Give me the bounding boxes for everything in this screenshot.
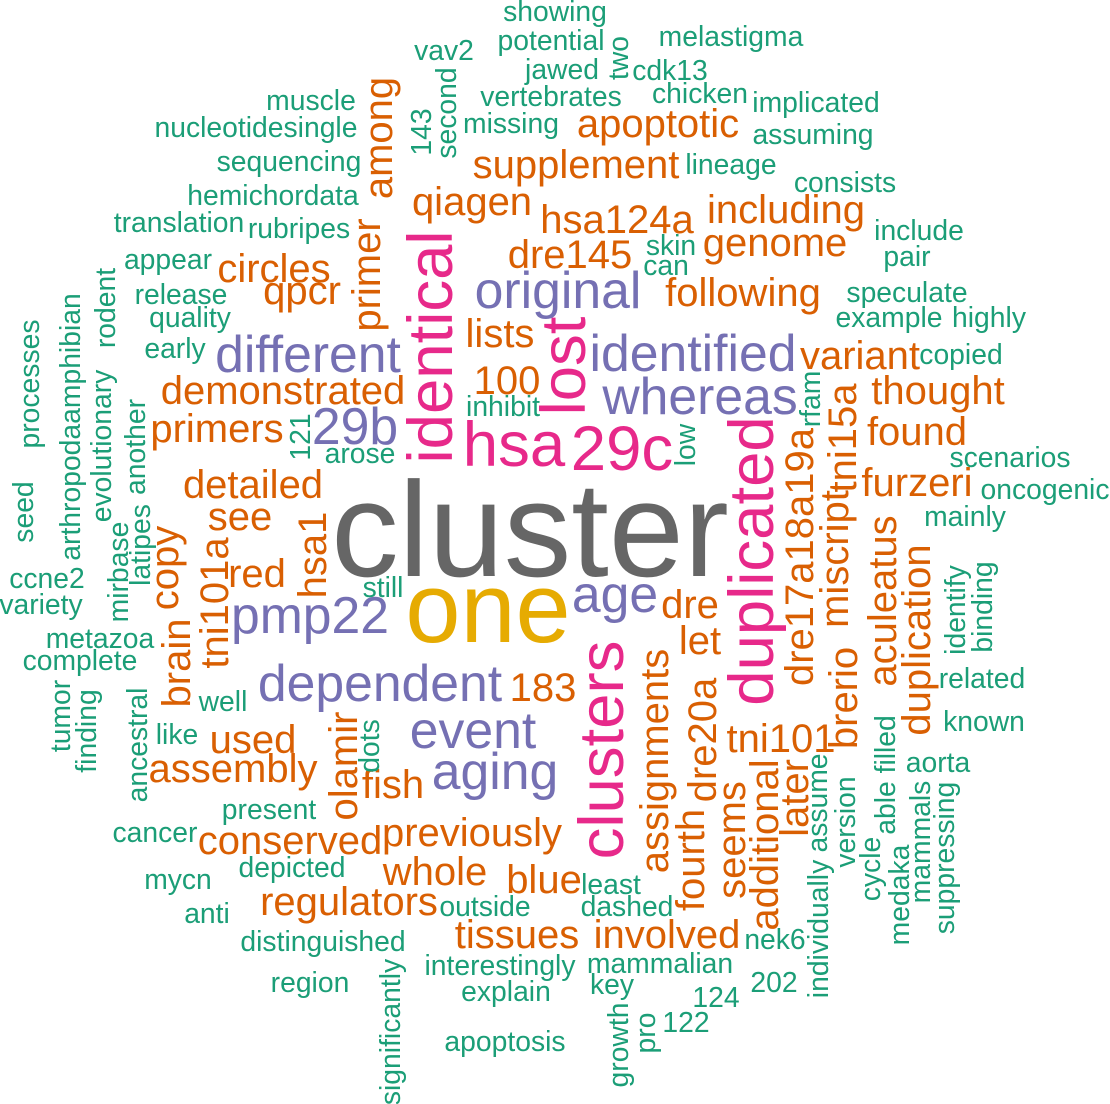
orange word group: supplement bbox=[473, 143, 679, 187]
green word group: 143 bbox=[405, 108, 437, 156]
word: clusters: clusters bbox=[567, 641, 637, 859]
orange word group: among bbox=[357, 77, 401, 199]
word: 29c: 29c bbox=[571, 414, 673, 484]
orange word group: brerio bbox=[822, 647, 866, 749]
orange word group: assembly bbox=[149, 747, 317, 791]
green word group: nucleotidesingle bbox=[155, 111, 357, 143]
green word group: copied bbox=[919, 338, 1003, 370]
orange word group: tni101a bbox=[193, 537, 237, 669]
purple word group: different bbox=[215, 325, 401, 383]
orange word group: demonstrated bbox=[161, 369, 405, 413]
green word group: skin bbox=[646, 229, 696, 261]
green word group: 124 bbox=[692, 981, 740, 1013]
orange word group: seems bbox=[710, 781, 754, 899]
green word group: cdk13 bbox=[632, 54, 708, 86]
green word group: arose bbox=[325, 437, 395, 469]
green word group: latipes bbox=[124, 504, 156, 586]
green word group: include bbox=[874, 214, 964, 246]
green word group: mammals bbox=[904, 781, 936, 903]
orange word group: dre bbox=[661, 583, 719, 627]
green word group: variety bbox=[0, 588, 84, 620]
green word group: 121 bbox=[284, 413, 316, 461]
orange word group: qiagen bbox=[412, 180, 532, 224]
orange word group: additional bbox=[743, 759, 787, 931]
word: hsa: hsa bbox=[463, 410, 566, 480]
purple word group bbox=[215, 261, 798, 800]
green word group: translation bbox=[114, 206, 244, 238]
green word group: known bbox=[943, 705, 1025, 737]
purple word group: age bbox=[572, 565, 658, 623]
green word group: two bbox=[602, 36, 634, 80]
orange word group: aculeatus bbox=[861, 515, 905, 687]
green word group: chicken bbox=[652, 77, 748, 109]
green word group: pro bbox=[629, 1013, 661, 1053]
purple word group: whereas bbox=[601, 367, 798, 425]
green word group: second bbox=[430, 67, 462, 159]
green word group: cycle bbox=[854, 837, 886, 901]
orange word group: primer bbox=[345, 218, 389, 332]
orange word group: dre145 bbox=[508, 233, 632, 277]
purple word group: aging bbox=[432, 742, 558, 800]
green word group: another bbox=[119, 399, 151, 495]
green word group: 122 bbox=[662, 1006, 710, 1038]
green word group: low bbox=[669, 423, 701, 466]
orange word group: hsa1 bbox=[291, 512, 335, 598]
green word group: hemichordata bbox=[187, 179, 359, 211]
orange word group bbox=[143, 77, 1005, 957]
green word group: highly bbox=[952, 301, 1027, 333]
orange word group: detailed bbox=[183, 463, 323, 507]
green word group: seed bbox=[7, 481, 39, 543]
orange word group: circles bbox=[217, 247, 331, 291]
orange word group: whole bbox=[382, 850, 487, 894]
green word group: tumor bbox=[44, 680, 76, 752]
orange word group: duplication bbox=[895, 544, 939, 736]
green word group: lineage bbox=[685, 148, 777, 180]
green word group: implicated bbox=[752, 86, 880, 118]
green word group: mycn bbox=[144, 863, 212, 895]
green word group: rfam bbox=[794, 371, 826, 427]
orange word group: olamir bbox=[322, 712, 366, 820]
green word group: dashed bbox=[581, 890, 673, 922]
green word group: anti bbox=[184, 897, 230, 929]
green word group: melastigma bbox=[659, 20, 804, 52]
green word group: binding bbox=[966, 561, 998, 653]
green word group: vertebrates bbox=[480, 80, 622, 112]
orange word group: regulators bbox=[260, 880, 438, 924]
green word group: rubripes bbox=[248, 212, 350, 244]
green word group: depicted bbox=[239, 851, 345, 883]
orange word group: fish bbox=[362, 763, 424, 807]
green word group: assume bbox=[801, 753, 833, 853]
green word group: interestingly bbox=[424, 949, 576, 981]
word: identical: identical bbox=[396, 231, 466, 463]
orange word group: miscript bbox=[813, 490, 857, 628]
orange word group: variant bbox=[800, 334, 920, 378]
orange word group: furzeri bbox=[861, 461, 973, 505]
purple word group: original bbox=[475, 261, 641, 319]
green word group: growth bbox=[602, 1003, 634, 1087]
purple word group: pmp22 bbox=[231, 586, 389, 644]
green word group: like bbox=[156, 718, 198, 750]
green word group: consists bbox=[794, 166, 896, 198]
purple word group: dependent bbox=[258, 654, 502, 712]
green word group: individually bbox=[802, 859, 834, 998]
green word group: finding bbox=[70, 689, 102, 773]
orange word group: blue bbox=[506, 858, 582, 902]
green word group: distinguished bbox=[240, 925, 406, 957]
orange word group: conserved bbox=[198, 819, 382, 863]
orange word group: apoptotic bbox=[577, 102, 739, 146]
green word group: complete bbox=[23, 644, 137, 676]
orange word group: see bbox=[208, 495, 272, 539]
green word group: version bbox=[829, 776, 861, 868]
orange word group: assignments bbox=[633, 649, 677, 873]
green word group: outside bbox=[439, 890, 531, 922]
green word group: mirbase bbox=[102, 522, 134, 622]
green word group: pair bbox=[883, 240, 931, 272]
green word group: mainly bbox=[924, 500, 1007, 532]
green word group: cancer bbox=[113, 816, 197, 848]
green word group: evolutionary bbox=[85, 369, 117, 522]
green word group: processes bbox=[13, 320, 45, 448]
green word group: oncogenic bbox=[980, 473, 1110, 505]
green word group: related bbox=[939, 662, 1025, 694]
green word group: arthropodaamphibian bbox=[54, 293, 86, 561]
orange word group: involved bbox=[594, 913, 740, 957]
purple word group: event bbox=[410, 701, 536, 759]
orange word group: lists bbox=[466, 312, 534, 356]
orange word group: following bbox=[665, 271, 821, 315]
green word group: able filled bbox=[869, 715, 901, 835]
orange word group: used bbox=[210, 718, 296, 762]
green word group: least bbox=[581, 868, 641, 900]
green word group: vav2 bbox=[414, 34, 474, 66]
green word group: early bbox=[144, 332, 207, 364]
green word group: rodent bbox=[89, 268, 121, 348]
orange word group: primers bbox=[150, 407, 284, 451]
purple word group: 29b bbox=[312, 397, 398, 455]
orange word group: let bbox=[679, 619, 721, 663]
green word group: jawed bbox=[524, 53, 599, 85]
green word group: aorta bbox=[906, 746, 971, 778]
green word group: suppressing bbox=[928, 782, 960, 934]
orange word group: genome bbox=[703, 221, 847, 265]
green word group: region bbox=[271, 966, 349, 998]
green word group: significantly bbox=[374, 958, 406, 1104]
green word group: well bbox=[198, 685, 247, 717]
green word group: scenarios bbox=[949, 441, 1071, 473]
orange word group: hsa124a bbox=[540, 198, 694, 242]
green word group: can bbox=[643, 249, 689, 281]
green word group: apoptosis bbox=[444, 1025, 566, 1057]
green word group: example bbox=[836, 301, 942, 333]
orange word group: red bbox=[228, 552, 286, 596]
green word group: still bbox=[363, 571, 403, 603]
green word group: missing bbox=[463, 107, 559, 139]
green word group: nek6 bbox=[744, 923, 806, 955]
green word group: 202 bbox=[750, 966, 798, 998]
orange word group: dre20a bbox=[681, 677, 725, 802]
orange word group: fourth bbox=[669, 809, 713, 911]
green word group: muscle bbox=[266, 84, 356, 116]
green word group: release bbox=[135, 278, 227, 310]
word: cluster: cluster bbox=[331, 454, 729, 605]
green word group: medaka bbox=[883, 844, 915, 945]
orange word group: qpcr bbox=[263, 269, 341, 313]
green word group: identify bbox=[939, 564, 971, 655]
green word group: mammalian bbox=[587, 947, 733, 979]
green word group: potential bbox=[498, 24, 604, 56]
green word group: ccne2 bbox=[9, 562, 85, 594]
word: duplicated: duplicated bbox=[717, 416, 787, 706]
orange word group: previously bbox=[382, 811, 562, 855]
green word group: explain bbox=[461, 975, 551, 1007]
green word group: sequencing bbox=[217, 145, 361, 177]
orange word group: including bbox=[707, 188, 865, 232]
orange word group: copy bbox=[143, 526, 187, 610]
green word group: inhibit bbox=[466, 390, 540, 422]
orange word group: thought bbox=[871, 369, 1005, 413]
pink word group bbox=[396, 231, 787, 859]
green word group: metazoa bbox=[46, 622, 155, 654]
word: one: one bbox=[405, 552, 571, 663]
green word group: present bbox=[222, 793, 316, 825]
orange word group: found bbox=[867, 410, 967, 454]
green word group: ancestral bbox=[121, 688, 153, 802]
green word group: assuming bbox=[752, 118, 874, 150]
orange word group: dre17a18a19a bbox=[778, 427, 822, 686]
orange word group: 100 bbox=[474, 359, 540, 403]
green word group: quality bbox=[149, 301, 232, 333]
green word group: speculate bbox=[846, 276, 968, 308]
green word group: dots bbox=[353, 719, 385, 773]
orange word group: tni101 bbox=[727, 717, 835, 761]
orange word group: later bbox=[773, 759, 817, 837]
purple word group: identified bbox=[590, 324, 796, 382]
green word group: appear bbox=[124, 243, 212, 275]
orange word group: 183 bbox=[510, 666, 576, 710]
word: lost: lost bbox=[529, 316, 599, 415]
orange word group: brain bbox=[155, 619, 199, 707]
green word group: key bbox=[590, 968, 635, 1000]
orange word group: tni15a bbox=[821, 383, 865, 492]
orange word group: tissues bbox=[455, 913, 579, 957]
